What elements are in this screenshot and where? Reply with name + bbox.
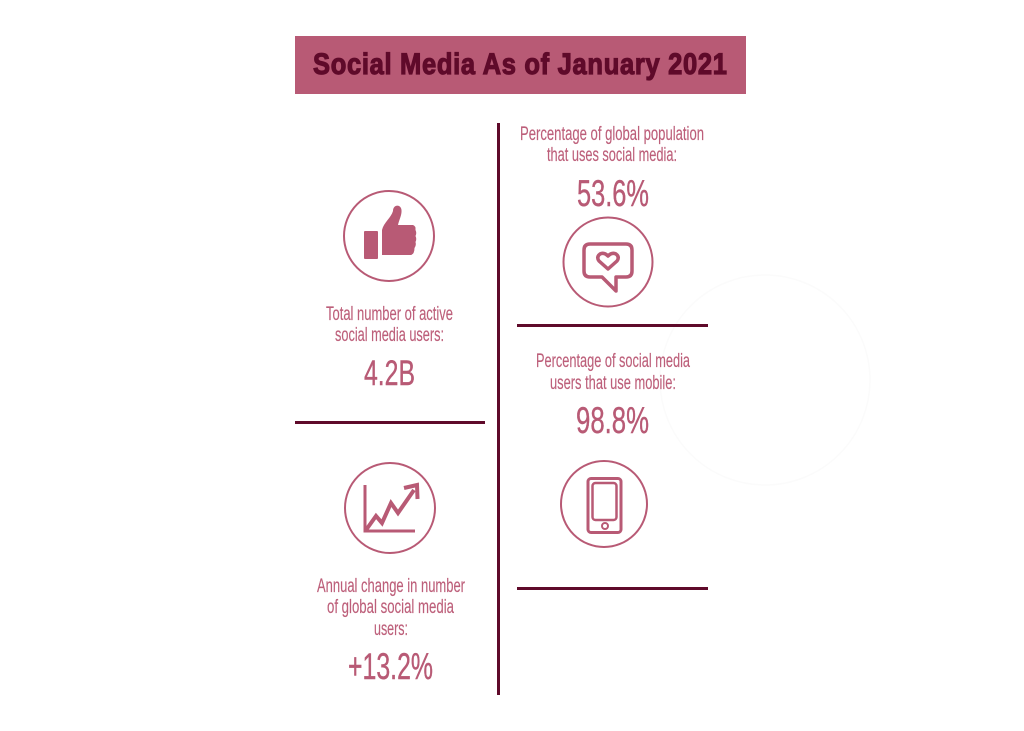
label: Annual change in number	[317, 576, 465, 597]
panel: mobile users	[536, 351, 690, 547]
value: 53.6%	[577, 173, 649, 214]
label	[520, 124, 704, 166]
panel: active users	[326, 191, 453, 393]
icon: smartphone	[561, 461, 647, 547]
label: of global social media	[327, 597, 454, 618]
faint background circle	[660, 275, 870, 485]
label: Percentage of social media	[536, 351, 690, 372]
label	[326, 304, 453, 346]
value: 98.8%	[576, 400, 649, 441]
value: +13.2%	[348, 646, 433, 687]
panel: global population	[520, 124, 704, 306]
label: social media users:	[335, 325, 444, 346]
label: Percentage of global population	[520, 124, 704, 145]
label: that uses social media:	[547, 145, 677, 166]
icon: speech bubble with heart	[564, 218, 652, 306]
label: users:	[374, 619, 408, 640]
label	[317, 576, 465, 640]
label	[536, 351, 690, 394]
icon: rising chart	[345, 463, 435, 553]
label: Total number of active	[326, 304, 453, 325]
title banner	[295, 36, 746, 94]
label: users that use mobile:	[550, 373, 676, 394]
right divider top	[517, 324, 708, 327]
right divider bottom	[517, 587, 708, 590]
title: Social Media As of January 2021	[313, 47, 727, 80]
panel: annual change	[317, 463, 465, 687]
left divider	[295, 421, 485, 424]
value: 4.2B	[364, 354, 415, 393]
icon: thumbs up	[344, 191, 434, 281]
vertical divider	[497, 123, 500, 695]
